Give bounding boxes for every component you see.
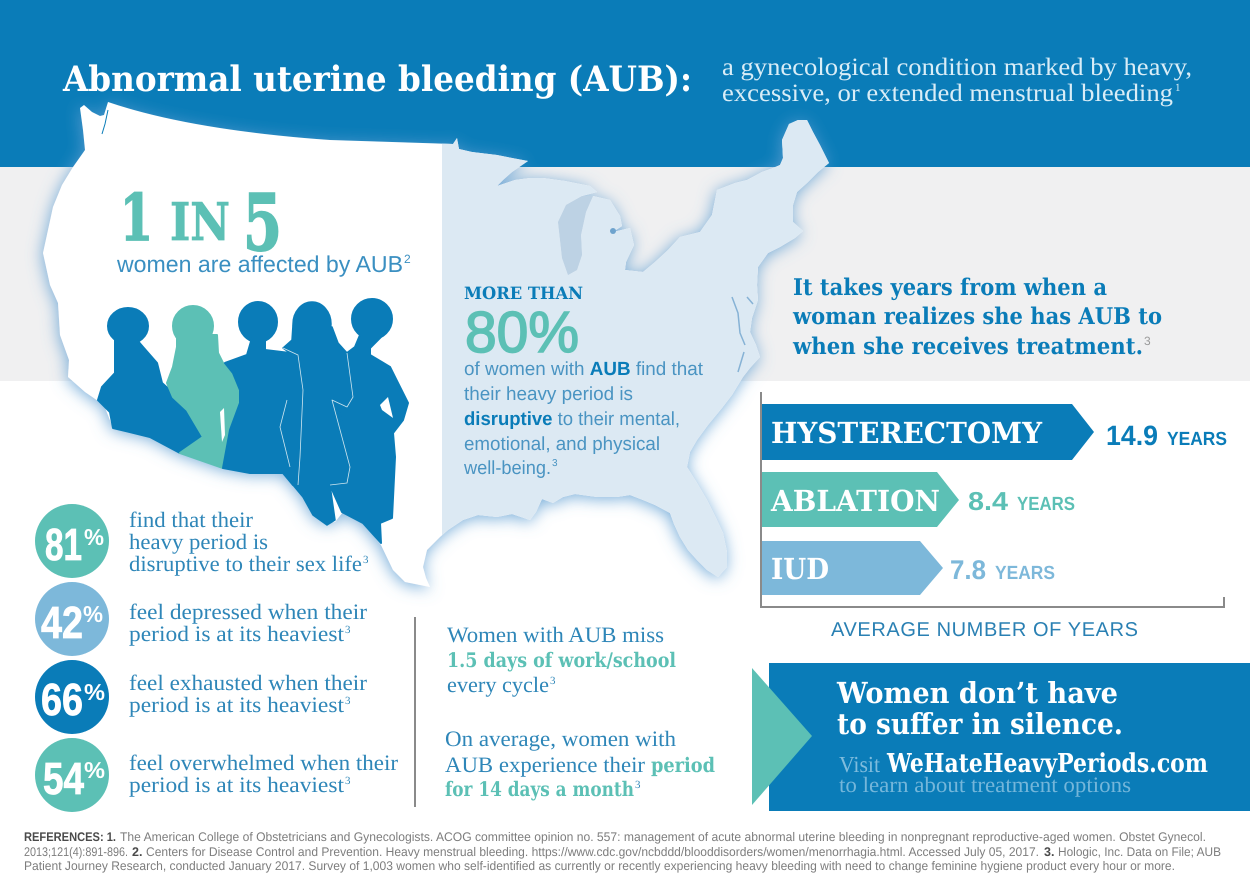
references: 3.: [1044, 845, 1054, 859]
stat: 42% depressed: 42: [41, 597, 83, 648]
bar: IUD: [762, 541, 1055, 595]
stat: 66% exhausted: period is at its heaviest: [129, 692, 344, 717]
call to action panel: to suffer in silence.: [837, 707, 1123, 741]
subtitle definition: [722, 54, 1192, 107]
stat: 14 days a month: for 14 days a month: [445, 777, 634, 801]
stat: missed days of work: Women with AUB miss: [447, 622, 664, 647]
references: The American College of Obstetricians and Gynecologists. ACOG committee opinion no. 557: management of acute abnormal uterine bleeding in nonpregnant reproductive-aged women. Obstet Gynecol.: [120, 830, 1206, 844]
stat: 54% overwhelmed: 3: [345, 775, 351, 787]
bar: ablation: [762, 472, 1075, 527]
stat: 66% exhausted: %: [84, 679, 105, 705]
stat: 1 in 5 women: IN: [170, 192, 230, 253]
stat: 81% disruptive to sex life: [35, 504, 369, 578]
stat: more than 80%: well-being.: [463, 458, 551, 479]
stat: more than 80%: emotional, and physical: [464, 434, 660, 455]
bar: hysterectomy: [762, 404, 1227, 460]
gap beside woman 2 arm: [220, 408, 225, 442]
woman 1 silhouette: [98, 308, 203, 453]
vertical divider: [414, 617, 416, 807]
subtitle definition: 1: [1175, 82, 1180, 94]
stat: more than 80%: of women with AUB find that: [464, 359, 704, 380]
bar: ablation: 8.4: [968, 486, 1009, 516]
stat: missed days of work: 3: [550, 675, 556, 687]
bar: IUD: YEARS: [995, 563, 1055, 584]
gap under woman 5 arm: [380, 397, 393, 418]
references: 2.: [132, 845, 142, 859]
stat: 81% disruptive to sex life: heavy period is: [129, 529, 268, 554]
references: Patient Journey Research, conducted January 2017. Survey of 1,003 women who self-identified as currently or recently experiencing heavy bleeding with need to change feminine hygiene product every hour or more.: [24, 859, 1175, 873]
bar: ablation: YEARS: [1017, 494, 1075, 515]
stat: 54% overwhelmed: [35, 738, 399, 812]
stat: 42% depressed: %: [83, 601, 103, 627]
top blue band: [0, 0, 1250, 167]
woman 5 silhouette: [330, 299, 408, 543]
call to action panel: to learn about treatment options: [839, 772, 1131, 797]
woman 2 silhouette: [167, 306, 240, 468]
stat: missed days of work: every cycle: [447, 672, 549, 697]
group of five women silhouettes: [98, 299, 408, 543]
call to action panel: Visit: [839, 752, 881, 777]
heading: years to treatment: when she receives treatment.: [792, 333, 1143, 360]
stat: 66% exhausted: feel exhausted when their: [129, 670, 368, 695]
thin outlines between figures: [280, 348, 353, 485]
stat: more than 80%: their heavy period is: [464, 384, 633, 405]
stat: 81% disruptive to sex life: 81: [45, 519, 82, 570]
axis label: AVERAGE NUMBER OF YEARS: [831, 619, 1138, 641]
stat: 14 days a month: On average, women with: [445, 726, 676, 751]
stat: missed days of work: 1.5 days of work/school: [447, 648, 676, 672]
heading: years to treatment: 3: [1144, 334, 1151, 348]
bar: hysterectomy: HYSTERECTOMY: [771, 416, 1042, 450]
references: REFERENCES: 1.: [24, 830, 116, 844]
references: Centers for Disease Control and Prevention. Heavy menstrual bleeding. https://www.cdc.gov/ncbddd/blooddisorders/women/menorrhagia.html. Accessed July 05, 2017.: [146, 845, 1039, 859]
stat: 14 days a month: [445, 726, 715, 801]
stat: 66% exhausted: [35, 660, 368, 734]
stat: 54% overwhelmed: feel overwhelmed when their: [129, 750, 399, 775]
stat: 66% exhausted: 66: [41, 674, 83, 725]
references: [24, 830, 1221, 873]
stat: 14 days a month: AUB experience their: [445, 752, 646, 777]
references: 2013;121(4):891-896.: [24, 845, 128, 859]
bar: hysterectomy: 14.9: [1106, 420, 1158, 451]
bar: hysterectomy: YEARS: [1167, 429, 1227, 450]
grey middle band: [0, 167, 1250, 381]
stat: missed days of work: [447, 622, 676, 697]
stat: 14 days a month: period: [651, 753, 715, 777]
bar: ablation: ABLATION: [770, 484, 940, 518]
subtitle definition: excessive, or extended menstrual bleeding: [722, 80, 1174, 107]
stat: 42% depressed: feel depressed when their: [129, 599, 368, 624]
icon: teal arrow: [752, 668, 812, 805]
stat: 1 in 5 women: [116, 178, 411, 277]
stat: 54% overwhelmed: period is at its heaviest: [129, 772, 344, 797]
stat: more than 80%: [463, 284, 704, 479]
bar: IUD: IUD: [771, 552, 829, 586]
stat: 66% exhausted: 3: [345, 695, 351, 707]
stat: 1 in 5 women: 5: [243, 178, 282, 269]
woman 3 silhouette: [223, 302, 303, 485]
heading: years to treatment: It takes years from when a: [793, 274, 1107, 301]
stat: 42% depressed: 3: [345, 624, 351, 636]
stat: 14 days a month: 3: [635, 779, 641, 791]
stat: more than 80%: MORE THAN: [464, 284, 583, 304]
stat: 42% depressed: period is at its heaviest: [129, 621, 344, 646]
title: Abnormal uterine bleeding (AUB):: [62, 59, 692, 100]
call to action panel: [752, 663, 1250, 811]
bar: IUD: 7.8: [950, 555, 986, 585]
call to action panel: Women don’t have: [836, 676, 1118, 710]
chart axes: [761, 392, 1224, 607]
stat: 42% depressed: [35, 582, 368, 656]
stat: 54% overwhelmed: %: [84, 757, 105, 783]
stat: 81% disruptive to sex life: %: [84, 524, 104, 550]
subtitle definition: a gynecological condition marked by heavy,: [722, 54, 1192, 81]
stat: 81% disruptive to sex life: find that their: [129, 507, 254, 532]
stat: 1 in 5 women: 1: [120, 181, 153, 256]
stat: more than 80%: 3: [552, 458, 558, 469]
heading: years to treatment: [792, 274, 1162, 360]
stat: 1 in 5 women: 2: [404, 252, 411, 266]
heading: years to treatment: woman realizes she has AUB to: [792, 303, 1162, 330]
stat: more than 80%: disruptive to their mental,: [464, 409, 680, 430]
map of the United States: [43, 102, 829, 587]
stat: 81% disruptive to sex life: 3: [363, 554, 369, 566]
stat: 81% disruptive to sex life: disruptive to their sex life: [129, 551, 362, 576]
stat: 54% overwhelmed: 54: [43, 753, 84, 804]
woman 4 silhouette: [283, 302, 353, 525]
stat: 1 in 5 women: women are affected by AUB: [116, 251, 403, 277]
references: Hologic, Inc. Data on File; AUB: [1058, 845, 1221, 859]
bar chart: average number of years: [761, 392, 1227, 641]
stat: more than 80%: 80%: [465, 300, 579, 365]
